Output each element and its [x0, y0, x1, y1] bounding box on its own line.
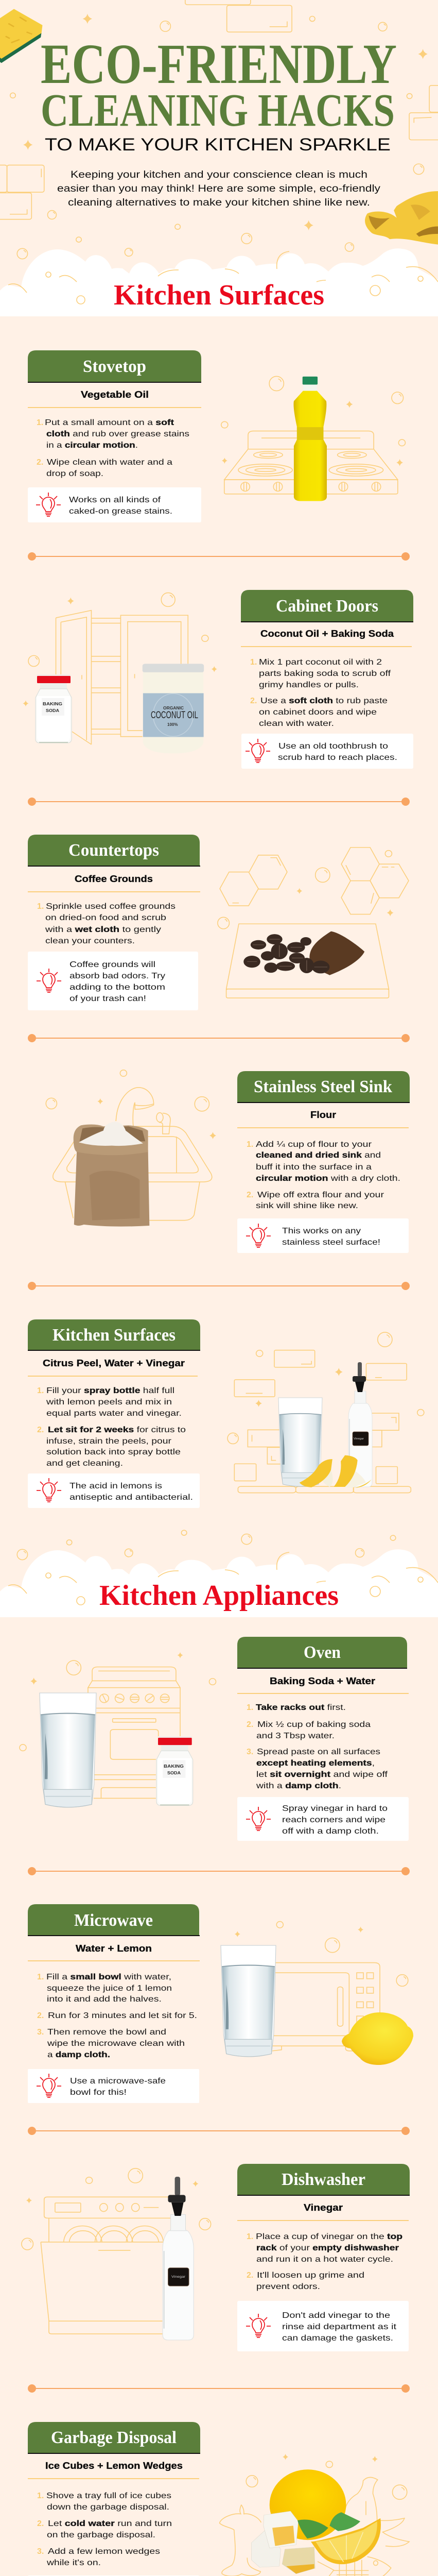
- tip box: Don't add vinegar to the: [282, 2311, 390, 2320]
- tip box: Use a microwave-safe: [70, 2077, 166, 2086]
- steps: 2.: [247, 1191, 253, 1199]
- sponge image: [0, 9, 42, 63]
- steps: squeeze the juice of 1 lemon: [47, 1984, 172, 1993]
- tip box: can damage the gaskets.: [282, 2334, 393, 2343]
- steps: 1.: [37, 1973, 44, 1981]
- steps: Mix ½ cup of baking soda: [257, 1720, 371, 1729]
- tip box: [237, 2301, 409, 2351]
- steps: [247, 2232, 402, 2291]
- tip box: Works on all kinds of: [69, 496, 161, 504]
- steps: with a wet cloth to gently: [45, 925, 161, 934]
- steps: Add a few lemon wedges: [48, 2547, 160, 2556]
- steps: Let sit for 2 weeks for citrus to: [48, 1426, 186, 1434]
- illustration: cabinet, coconut oil and baking soda: COCONUT OIL: [151, 710, 198, 721]
- tip box: absorb bad odors. Try: [69, 972, 165, 980]
- ingredient: Ice Cubes + Lemon Wedges: [45, 2461, 183, 2471]
- steps: [37, 902, 176, 945]
- header: [28, 2422, 200, 2453]
- steps: Fill your spray bottle half full: [46, 1386, 174, 1395]
- steps: with a damp cloth .: [256, 1782, 341, 1790]
- steps: prevent odors.: [256, 2282, 320, 2291]
- section heading: kitchen surfaces: Kitchen Surfaces: [114, 279, 324, 311]
- steps: down the garbage disposal.: [47, 2503, 169, 2512]
- tip box: Coffee grounds will: [69, 960, 155, 969]
- steps: [37, 1973, 197, 2059]
- panel: cabinet doors: [241, 590, 413, 769]
- section heading: kitchen appliances: Kitchen Appliances: [99, 1580, 339, 1612]
- steps: [37, 418, 189, 478]
- steps: 2.: [250, 697, 257, 705]
- tip box: [237, 1797, 409, 1841]
- steps: 1.: [37, 902, 44, 911]
- divider: [28, 1867, 410, 1875]
- steps: in a circular motion .: [46, 441, 138, 450]
- panel title: Garbage Disposal: [51, 2428, 177, 2447]
- steps: sink will shine like new.: [256, 1201, 358, 1210]
- steps: 1.: [37, 418, 43, 427]
- steps: 2.: [37, 2011, 44, 2020]
- steps: 2.: [247, 2271, 253, 2280]
- divider: [28, 1282, 410, 1290]
- steps: 2.: [37, 1426, 44, 1434]
- panel title: Countertops: [68, 841, 159, 860]
- steps: [37, 1386, 186, 1468]
- steps: rack of your empty dishwasher: [256, 2244, 399, 2252]
- intro paragraph: easier than you may think! Here are some simple, eco-friendly: [57, 183, 381, 194]
- steps: 1.: [247, 1140, 253, 1149]
- panel: oven: [237, 1637, 409, 1841]
- tip box: scrub hard to reach places.: [278, 753, 397, 762]
- divider: [28, 798, 410, 806]
- tip box: [28, 2575, 199, 2576]
- steps: 3.: [37, 2547, 44, 2556]
- tip box: stainless steel surface!: [282, 1238, 380, 1247]
- ingredient: Citrus Peel, Water + Vinegar: [43, 1358, 185, 1368]
- steps: [250, 658, 391, 728]
- steps: equal parts water and vinegar.: [46, 1409, 182, 1418]
- steps: 1.: [37, 2492, 44, 2500]
- tip box: antiseptic and antibacterial.: [69, 1493, 193, 1502]
- steps: on the garbage disposal.: [47, 2531, 155, 2539]
- panel: stainless steel sink: [237, 1071, 410, 1253]
- steps: on cabinet doors and wipe: [259, 708, 377, 717]
- steps: Put a small amount on a soft: [45, 418, 174, 427]
- panel: dishwasher: [237, 2164, 410, 2351]
- steps: wipe the microwave clean with: [47, 2039, 185, 2048]
- ingredient: Vegetable Oil: [81, 389, 149, 400]
- panel title: Cabinet Doors: [276, 597, 378, 616]
- tip box: Spray vinegar in hard to: [282, 1804, 388, 1813]
- panel title: Microwave: [74, 1911, 153, 1930]
- steps: 1.: [247, 1703, 253, 1712]
- steps: Run for 3 minutes and let sit for 5.: [48, 2011, 197, 2020]
- steps: [37, 2492, 172, 2567]
- steps: Wipe off extra flour and your: [257, 1191, 384, 1199]
- tip box: This works on any: [282, 1227, 361, 1235]
- panel title: Oven: [304, 1643, 341, 1662]
- panel: countertops: [28, 835, 200, 1010]
- illustration: cabinet, coconut oil and baking soda: SODA: [46, 708, 59, 713]
- section heading: kitchen surfaces: [0, 248, 438, 316]
- header: [237, 2164, 410, 2195]
- steps: Spread paste on all surfaces: [257, 1748, 380, 1756]
- header: [28, 350, 201, 382]
- steps: a damp cloth.: [47, 2050, 110, 2059]
- tip box: [28, 487, 201, 522]
- illustration: stove and vegetable oil bottle: [221, 376, 405, 501]
- panel title: Kitchen Surfaces: [52, 1326, 176, 1345]
- steps: buff it into the surface in a: [256, 1163, 372, 1172]
- bubbles above appliances heading: [17, 1530, 396, 1560]
- illustration: dishwasher and vinegar: Vinegar: [171, 2275, 186, 2279]
- steps: 1.: [250, 658, 257, 667]
- steps: parts baking soda to scrub off: [259, 669, 391, 678]
- illustration: tiles, glass of water, vinegar, lemon peel: [227, 1332, 424, 1493]
- tip box: bowl for this!: [70, 2088, 127, 2097]
- panel title: Stovetop: [83, 357, 146, 376]
- header: [28, 835, 200, 866]
- ingredient: Water + Lemon: [76, 1943, 152, 1954]
- header: [28, 1904, 199, 1936]
- divider: [28, 2384, 410, 2393]
- illustration: lemon, ice cubes, food scraps: [220, 2454, 409, 2576]
- tip box: off with a damp cloth.: [282, 1827, 379, 1836]
- steps: [247, 1703, 388, 1790]
- steps: [247, 1140, 400, 1210]
- steps: 3.: [37, 2028, 44, 2037]
- illustration: cabinet, coconut oil and baking soda: [23, 593, 217, 753]
- steps: cleaned and dried sink and: [256, 1151, 381, 1160]
- tip box: [28, 952, 198, 1010]
- illustration: hex tiles, board and coffee: [218, 848, 409, 998]
- intro paragraph: cleaning alternatives to make your kitchen shine like new.: [68, 197, 370, 208]
- steps: 2.: [37, 2519, 44, 2528]
- steps: and run it on a hot water cycle.: [256, 2255, 393, 2264]
- steps: Place a cup of vinegar on the top: [256, 2232, 402, 2241]
- steps: clean your counters.: [45, 937, 135, 945]
- ingredient: Coffee Grounds: [75, 874, 153, 884]
- ingredient: Flour: [310, 1110, 336, 1120]
- steps: and get cleaning.: [46, 1459, 123, 1468]
- panel: kitchen surfaces: [28, 1319, 200, 1508]
- header: [237, 1637, 407, 1668]
- steps: while it's on.: [46, 2558, 101, 2567]
- subtitle: TO MAKE YOUR KITCHEN SPARKLE: [45, 135, 391, 155]
- steps: 2.: [247, 1720, 253, 1729]
- steps: Use a soft cloth to rub paste: [260, 697, 388, 705]
- tip box: [28, 2069, 199, 2103]
- panel title: Dishwasher: [282, 2170, 365, 2189]
- illustration: oven, water glass, baking soda: BAKING: [164, 1764, 184, 1769]
- steps: 1.: [247, 2232, 253, 2241]
- header: [241, 590, 413, 622]
- tip box: rinse aid department as it: [282, 2323, 397, 2331]
- divider: [28, 552, 410, 561]
- tip box: of your trash can!: [69, 994, 146, 1003]
- tip box: adding to the bottom: [69, 983, 165, 992]
- header decoration: tiles, bubbles, sparkles: [0, 0, 438, 259]
- steps: Fill a small bowl with water,: [46, 1973, 171, 1981]
- steps: Let cold water run and turn: [48, 2519, 172, 2528]
- steps: Wipe clean with water and a: [47, 458, 172, 467]
- steps: with lemon peels and mix in: [46, 1398, 172, 1406]
- illustration: oven, water glass, baking soda: [20, 1652, 216, 1807]
- steps: clean with water.: [259, 719, 334, 728]
- section heading: kitchen appliances: [0, 1549, 438, 1617]
- divider: [28, 1034, 410, 1042]
- ingredient: Baking Soda + Water: [270, 1676, 375, 1686]
- panel: microwave: [28, 1904, 200, 2103]
- tip box: [241, 734, 413, 769]
- tip box: reach corners and wipe: [282, 1816, 386, 1824]
- tip box: caked-on grease stains.: [69, 507, 172, 516]
- steps: 3.: [247, 1748, 253, 1756]
- steps: let sit overnight and wipe off: [256, 1770, 388, 1779]
- steps: Take racks out first.: [256, 1703, 346, 1712]
- panel title: Stainless Steel Sink: [254, 1077, 392, 1096]
- steps: drop of soap.: [46, 469, 103, 478]
- steps: cloth and rub over grease stains: [46, 430, 189, 438]
- steps: Then remove the bowl and: [47, 2028, 166, 2037]
- steps: solution back into spray bottle: [46, 1448, 181, 1456]
- illustration: microwave, glass, lemon: [221, 1922, 413, 2065]
- steps: grimy handles or pulls.: [259, 681, 359, 689]
- steps: Shove a tray full of ice cubes: [46, 2492, 171, 2500]
- steps: circular motion with a dry cloth.: [256, 1174, 400, 1183]
- divider: [28, 2127, 410, 2135]
- steps: and 3 Tbsp water.: [256, 1732, 335, 1740]
- steps: Add ¼ cup of flour to your: [256, 1140, 372, 1149]
- ingredient: Vinegar: [304, 2202, 343, 2213]
- illustration: tiles, glass of water, vinegar, lemon peel: Vinegar: [354, 1437, 364, 1440]
- illustration: cabinet, coconut oil and baking soda: 100%: [167, 722, 178, 727]
- tip box: Use an old toothbrush to: [278, 742, 388, 751]
- steps: Sprinkle used coffee grounds: [46, 902, 176, 911]
- illustration: cabinet, coconut oil and baking soda: BAKING: [43, 701, 62, 706]
- illustration: cabinet, coconut oil and baking soda: ORGANIC: [163, 706, 184, 710]
- tip box: [28, 1473, 200, 1508]
- header: [28, 1319, 200, 1350]
- steps: except heating elements ,: [256, 1759, 375, 1768]
- ingredient: Coconut Oil + Baking Soda: [260, 629, 394, 639]
- illustration: oven, water glass, baking soda: SODA: [167, 1770, 181, 1775]
- cloth image: [365, 191, 438, 245]
- steps: infuse, strain the peels, pour: [46, 1437, 172, 1446]
- steps: into it and add the halves.: [47, 1995, 162, 2004]
- illustration: sink and flour bag: [46, 1070, 216, 1227]
- steps: 2.: [37, 458, 43, 467]
- panel: garbage disposal: [28, 2422, 200, 2576]
- steps: 1.: [37, 1386, 44, 1395]
- header: [237, 1071, 410, 1103]
- intro paragraph: [57, 170, 381, 208]
- tip box: [237, 1218, 409, 1253]
- panel: stovetop: [28, 350, 201, 522]
- tip box: The acid in lemons is: [69, 1482, 162, 1490]
- steps: Mix 1 part coconut oil with 2: [259, 658, 382, 667]
- illustration: dishwasher and vinegar: [22, 2168, 211, 2340]
- intro paragraph: Keeping your kitchen and your conscience clean is much: [71, 170, 367, 180]
- steps: on dried-on food and scrub: [45, 913, 166, 922]
- steps: It'll loosen up grime and: [257, 2271, 364, 2280]
